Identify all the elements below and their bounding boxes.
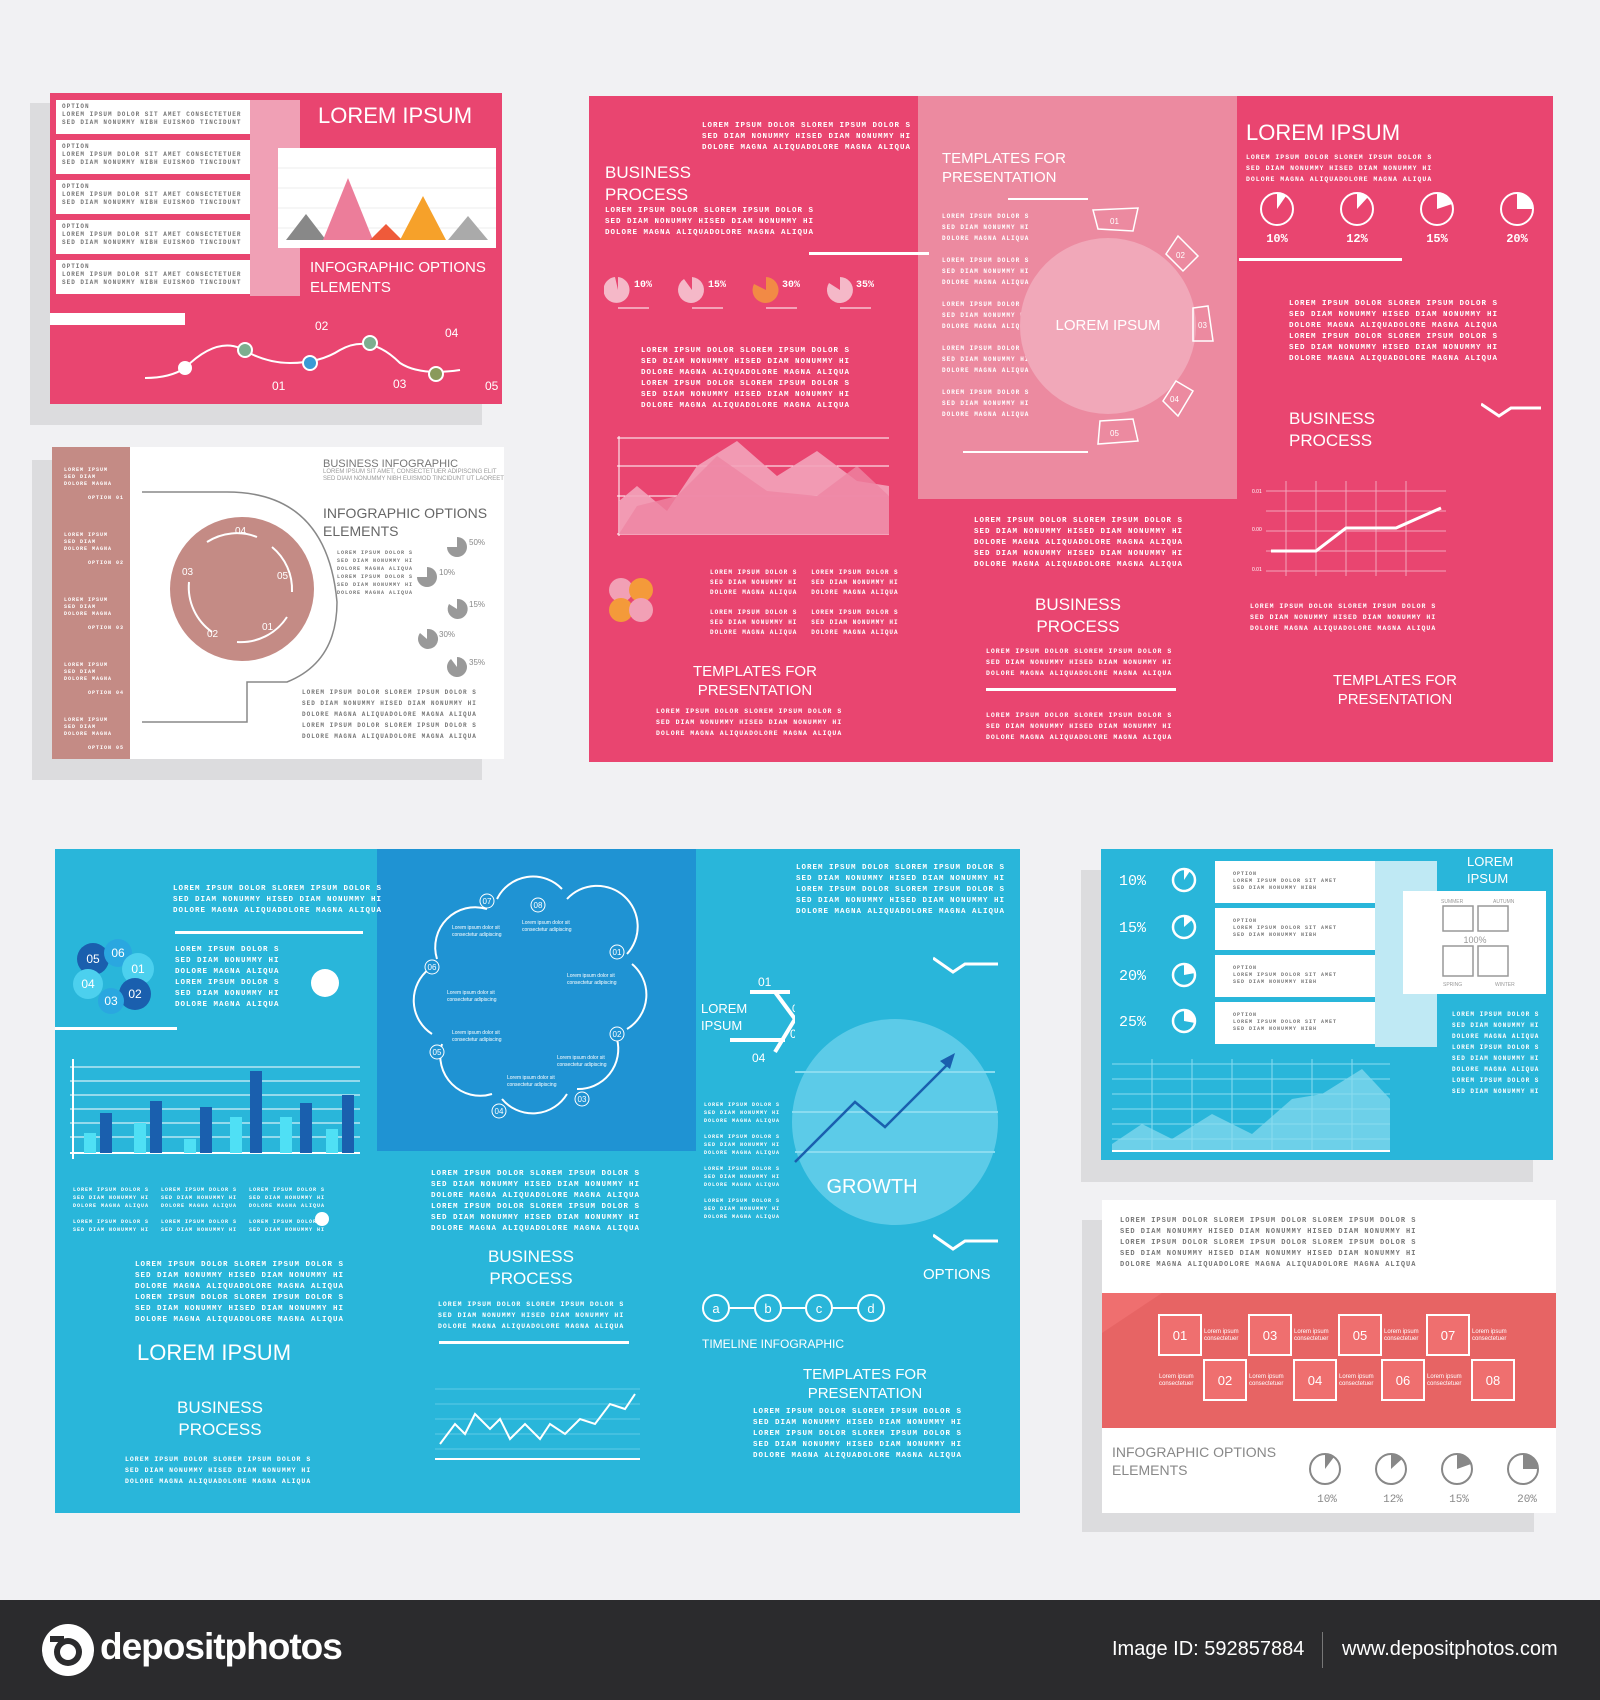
panel A: pink options chart (50, 93, 502, 404)
circle cluster icon: 04 (81, 977, 95, 991)
seasons box (1403, 891, 1546, 994)
circle cluster icon: 03 (104, 994, 118, 1008)
line chart: 0.00 (1252, 527, 1262, 533)
darker center panel: Lorem ipsum dolor sit (522, 920, 570, 926)
circle diagram (1020, 207, 1214, 445)
panel E: blue right: IPSUM (1467, 871, 1508, 886)
panel D: big blue: LOREM IPSUM (137, 1340, 291, 1365)
panel D: big blue: OPTIONS (923, 1266, 991, 1283)
image id: Image ID: 592857884 (1112, 1638, 1304, 1660)
wave timeline: 05 (485, 379, 499, 393)
flower icon (609, 578, 653, 622)
panel B: white circle infographic: LOREM IPSUM SIT AMET, CONSECTETUER ADIPISCING ELIT (323, 469, 497, 475)
top text: LOREM IPSUM DOLOR SLOREM IPSUM DOLOR S SED DIAM NONUMMY HISED DIAM NONUMMY HI DOLORE MAGNA ALIQUADOLORE MAGNA ALIQUA (702, 122, 911, 152)
percent dial list: 10% (1119, 873, 1147, 890)
subtitle: INFOGRAPHIC OPTIONS (310, 259, 486, 276)
option tabs: OPTION LOREM IPSUM DOLOR SIT AMET CONSECTETUER SED DIAM NONUMMY NIBH EUISMOD TINCIDUNT (62, 103, 241, 126)
darker center panel: consectetur adipiscing (447, 997, 497, 1003)
pie list: 30% (439, 630, 455, 639)
coral band with numbered boxes: consectetuer (1472, 1336, 1506, 1342)
head circle diagram (142, 491, 338, 723)
title: LOREM IPSUM (318, 103, 472, 128)
panel B: white circle infographic: ELEMENTS (323, 523, 398, 539)
seasons box: WINTER (1495, 982, 1515, 988)
panel D: big blue: LOREM IPSUM DOLOR SLOREM IPSUM DOLOR S SED DIAM NONUMMY HISED DIAM NONUMMY HI DOLORE MAGNA ALIQUADOLORE MAGNA ALIQUA (173, 885, 382, 915)
heading business process: BUSINESS (605, 163, 691, 182)
brown sidebar (52, 447, 130, 759)
coral band with numbered boxes: consectetuer (1249, 1381, 1283, 1387)
coral band with numbered boxes: 08 (1486, 1373, 1500, 1388)
coral band with numbered boxes: consectetuer (1384, 1336, 1418, 1342)
panel C: big pink: LOREM IPSUM DOLOR SLOREM IPSUM DOLOR S SED DIAM NONUMMY HISED DIAM NONUMMY HI DOLORE MAGNA ALIQUADOLORE MAGNA ALIQUA (1246, 154, 1432, 183)
circle diagram: LOREM IPSUM (1055, 317, 1161, 334)
pie percentages (604, 277, 874, 308)
darker center panel: 08 (534, 901, 543, 910)
panel D: big blue: TIMELINE INFOGRAPHIC (702, 1337, 844, 1351)
line chart: 0.01 (1252, 567, 1262, 573)
panel D: big blue: LOREM IPSUM DOLOR SLOREM IPSUM DOLOR S SED DIAM NONUMMY HISED DIAM NONUMMY HI DOLORE MAGNA ALIQUADOLORE MAGNA ALIQUA LOREM IPSUM DOLOR SLOREM IPSUM DOLOR S SED DIAM NONUMMY HISED DIAM NONUMMY HI DOLORE MAGNA ALIQUADOLORE MAGNA ALIQUA (135, 1261, 344, 1324)
center bottom: LOREM IPSUM DOLOR SLOREM IPSUM DOLOR S SED DIAM NONUMMY HISED DIAM NONUMMY HI DOLORE MAGNA ALIQUADOLORE MAGNA ALIQUA LOREM IPSUM DOLOR SLOREM IPSUM DOLOR S SED DIAM NONUMMY HISED DIAM NONUMMY HI DOLORE MAGNA ALIQUADOLORE MAGNA ALIQUA (431, 1170, 640, 1233)
timeline abcd: c (816, 1301, 823, 1316)
circle cluster icon: 05 (86, 952, 100, 966)
brown sidebar: LOREM IPSUM SED DIAM DOLORE MAGNA OPTION 01 (64, 467, 124, 501)
head circle diagram: 01 (262, 622, 274, 633)
panel F: white/coral timeline (1102, 1200, 1556, 1513)
panel C: big pink: LOREM IPSUM DOLOR SLOREM IPSUM DOLOR S SED DIAM NONUMMY HISED DIAM NONUMMY HI DOLORE MAGNA ALIQUADOLORE MAGNA ALIQUA LOREM IPSUM DOLOR SLOREM IPSUM DOLOR S SED DIAM NONUMMY HISED DIAM NONUMMY HI DOLORE MAGNA ALIQUADOLORE MAGNA ALIQUA (1289, 300, 1498, 363)
percent rings: 15% (1449, 1494, 1469, 1506)
coral band with numbered boxes: consectetuer (1204, 1336, 1238, 1342)
panel D: big blue: LOREM IPSUM DOLOR SLOREM IPSUM DOLOR S SED DIAM NONUMMY HISED DIAM NONUMMY HI DOLORE MAGNA ALIQUADOLORE MAGNA ALIQUA (125, 1456, 311, 1485)
panel D: big blue: LOREM IPSUM DOLOR S LOREM IPSUM DOLOR S LOREM IPSUM DOLOR S SED DIAM NONUMMY HI SED DIAM NONUMMY HI SED DIAM NONUMMY HI DOLORE MAGNA ALIQUA DOLORE MAGNA ALIQUA DOLORE MAGNA ALIQUA LOREM IPSUM DOLOR S LOREM IPSUM DOLOR S LOREM IPSUM DOLOR S SED DIAM NONUMMY HI SED DIAM NONUMMY HI SED DIAM NONUMMY HI (73, 1187, 325, 1233)
panel C: big pink: PRESENTATION (698, 682, 812, 699)
coral band with numbered boxes: Lorem ipsum (1204, 1329, 1239, 1335)
panel D: big blue (55, 849, 1020, 1513)
coral band with numbered boxes: 01 (1173, 1328, 1187, 1343)
circle diagram: 05 (1110, 429, 1119, 438)
percent rings: 10% (1317, 1494, 1337, 1506)
coral band with numbered boxes: 03 (1263, 1328, 1277, 1343)
coral band with numbered boxes: Lorem ipsum (1339, 1374, 1374, 1380)
right column: LOREM IPSUM (1246, 120, 1400, 145)
darker center panel: consectetur adipiscing (567, 980, 617, 986)
timeline abcd: a (712, 1301, 720, 1316)
heading business process: PROCESS (605, 185, 688, 204)
head circle diagram: 04 (235, 526, 247, 537)
right column: LOREM IPSUM DOLOR SLOREM IPSUM DOLOR S SED DIAM NONUMMY HISED DIAM NONUMMY HI LOREM IPSUM DOLOR SLOREM IPSUM DOLOR S SED DIAM NONUMMY HISED DIAM NONUMMY HI DOLORE MAGNA ALIQUADOLORE MAGNA ALIQUA (796, 864, 1005, 916)
pie list: 15% (469, 600, 485, 609)
darker center panel: Lorem ipsum dolor sit (447, 990, 495, 996)
panel D: big blue: LOREM IPSUM DOLOR SLOREM IPSUM DOLOR S SED DIAM NONUMMY HISED DIAM NONUMMY HI DOLORE MAGNA ALIQUADOLORE MAGNA ALIQUA (438, 1301, 624, 1330)
option cards: OPTION LOREM IPSUM DOLOR SIT AMET SED DIAM NONUMMY NIBH (1233, 1012, 1337, 1032)
panel D: big blue: BUSINESS (177, 1398, 263, 1417)
panel F: white/coral timeline: ELEMENTS (1112, 1462, 1187, 1478)
white bar (50, 313, 185, 325)
wave timeline: 03 (393, 377, 407, 391)
coral band with numbered boxes: 07 (1441, 1328, 1455, 1343)
panel E: blue right (1101, 849, 1553, 1160)
pie percentages: 10% (634, 280, 652, 291)
growth circle (792, 1019, 998, 1225)
circle diagram: 01 (1110, 217, 1119, 226)
panel B: white circle infographic: INFOGRAPHIC OPTIONS (323, 505, 487, 521)
pie list: 35% (469, 658, 485, 667)
text block: LOREM IPSUM DOLOR SLOREM IPSUM DOLOR S SED DIAM NONUMMY HISED DIAM NONUMMY HI DOLORE MAGNA ALIQUADOLORE MAGNA ALIQUA LOREM IPSUM DOLOR SLOREM IPSUM DOLOR S DOLORE MAGNA ALIQUADOLORE MAGNA ALIQUA (302, 689, 477, 740)
panel C: big pink: LOREM IPSUM DOLOR S LOREM IPSUM DOLOR S SED DIAM NONUMMY HI SED DIAM NONUMMY HI DOLORE MAGNA ALIQUA DOLORE MAGNA ALIQUA LOREM IPSUM DOLOR S LOREM IPSUM DOLOR S SED DIAM NONUMMY HI SED DIAM NONUMMY HI DOLORE MAGNA ALIQUA DOLORE MAGNA ALIQUA (710, 569, 899, 636)
wave timeline: 04 (445, 326, 459, 340)
coral band with numbered boxes (1102, 1293, 1556, 1428)
brown sidebar: LOREM IPSUM SED DIAM DOLORE MAGNA OPTION 02 (64, 532, 124, 566)
lorem steps (730, 975, 795, 1065)
panel C: big pink: LOREM IPSUM DOLOR SLOREM IPSUM DOLOR S SED DIAM NONUMMY HISED DIAM NONUMMY HI DOLORE MAGNA ALIQUADOLORE MAGNA ALIQUA (986, 648, 1172, 677)
panel D: big blue: PRESENTATION (808, 1385, 922, 1402)
coral band with numbered boxes: Lorem ipsum (1472, 1329, 1507, 1335)
seasons box: SPRING (1443, 982, 1462, 988)
percent rings (1309, 1453, 1539, 1506)
coral band with numbered boxes: Lorem ipsum (1159, 1374, 1194, 1380)
percent dial list (1119, 868, 1196, 1034)
panel C: big pink: PROCESS (1289, 431, 1372, 450)
panel C: big pink: TEMPLATES FOR (1333, 672, 1457, 689)
darker center panel: consectetur adipiscing (557, 1062, 607, 1068)
panel D: big blue: TEMPLATES FOR (803, 1366, 927, 1383)
percent dial list: 25% (1119, 1014, 1147, 1031)
logo icon (42, 1624, 94, 1676)
percent dial list: 15% (1119, 920, 1147, 937)
panel C: big pink: LOREM IPSUM DOLOR SLOREM IPSUM DOLOR S SED DIAM NONUMMY HISED DIAM NONUMMY HI DOLORE MAGNA ALIQUADOLORE MAGNA ALIQUA (656, 708, 842, 737)
darker center panel: consectetur adipiscing (522, 927, 572, 933)
option tabs: OPTION LOREM IPSUM DOLOR SIT AMET CONSECTETUER SED DIAM NONUMMY NIBH EUISMOD TINCIDUNT (62, 223, 241, 246)
darker center panel: 03 (578, 1095, 587, 1104)
circle diagram: 03 (1198, 321, 1207, 330)
coral band with numbered boxes: consectetuer (1159, 1381, 1193, 1387)
headings: BUSINESS INFOGRAPHIC (323, 458, 458, 470)
panel C: big pink: LOREM IPSUM DOLOR SLOREM IPSUM DOLOR S SED DIAM NONUMMY HISED DIAM NONUMMY HI DOLORE MAGNA ALIQUADOLORE MAGNA ALIQUA LOREM IPSUM DOLOR SLOREM IPSUM DOLOR S SED DIAM NONUMMY HISED DIAM NONUMMY HI DOLORE MAGNA ALIQUADOLORE MAGNA ALIQUA (641, 347, 850, 410)
darker center panel: consectetur adipiscing (452, 1037, 502, 1043)
url: www.depositphotos.com (1342, 1638, 1558, 1660)
darker center panel: 06 (428, 963, 437, 972)
panel F: white/coral timeline: LOREM IPSUM DOLOR SLOREM IPSUM DOLOR SLOREM IPSUM DOLOR S SED DIAM NONUMMY HISED DIAM NONUMMY HISED DIAM NONUMMY HI LOREM IPSUM DOLOR SLOREM IPSUM DOLOR SLOREM IPSUM DOLOR S SED DIAM NONUMMY HISED DIAM NONUMMY HISED DIAM NONUMMY HI DOLORE MAGNA ALIQUADOLORE MAGNA ALIQUADOLORE MAGNA ALIQUA (1120, 1217, 1416, 1269)
circle cluster icon: 01 (131, 962, 145, 976)
pie percentages: 15% (708, 280, 726, 291)
pie percentages: 35% (856, 280, 874, 291)
subtitle: ELEMENTS (310, 279, 391, 296)
darker center panel: consectetur adipiscing (452, 932, 502, 938)
check arrow (1481, 402, 1541, 418)
panel C: big pink: LOREM IPSUM DOLOR SLOREM IPSUM DOLOR S SED DIAM NONUMMY HISED DIAM NONUMMY HI DOLORE MAGNA ALIQUADOLORE MAGNA ALIQUA (605, 207, 814, 237)
timeline abcd: b (764, 1301, 772, 1316)
panel D: big blue: IPSUM (701, 1018, 742, 1033)
coral band with numbered boxes: 06 (1396, 1373, 1410, 1388)
option tabs: OPTION LOREM IPSUM DOLOR SIT AMET CONSECTETUER SED DIAM NONUMMY NIBH EUISMOD TINCIDUNT (62, 263, 241, 286)
darker center panel: Lorem ipsum dolor sit (452, 1030, 500, 1036)
panel D: big blue: LOREM (701, 1001, 747, 1016)
area grid chart (1112, 1059, 1390, 1152)
panel B: white circle infographic: SED DIAM NONUMMY NIBH EUISMOD TINCIDUNT UT LAOREET (323, 476, 504, 482)
darker center panel: 07 (483, 897, 492, 906)
darker center panel: Lorem ipsum dolor sit (452, 925, 500, 931)
panel B: white circle infographic (52, 447, 504, 759)
panel C: big pink: LOREM IPSUM DOLOR SLOREM IPSUM DOLOR S SED DIAM NONUMMY HISED DIAM NONUMMY HI DOLORE MAGNA ALIQUADOLORE MAGNA ALIQUA (1250, 603, 1436, 632)
option tabs (56, 100, 300, 296)
panel D: big blue: BUSINESS (488, 1247, 574, 1266)
footer bar (0, 1600, 1600, 1700)
darker center panel: Lorem ipsum dolor sit (567, 973, 615, 979)
circle cluster icon: 02 (128, 987, 142, 1001)
head circle diagram: 03 (182, 567, 194, 578)
darker center panel: 05 (433, 1048, 442, 1057)
middle-bottom text: LOREM IPSUM DOLOR SLOREM IPSUM DOLOR S SED DIAM NONUMMY HISED DIAM NONUMMY HI DOLORE MAGNA ALIQUADOLORE MAGNA ALIQUA SED DIAM NONUMMY HISED DIAM NONUMMY HI DOLORE MAGNA ALIQUADOLORE MAGNA ALIQUA (974, 517, 1183, 569)
panel D: big blue: PROCESS (489, 1269, 573, 1288)
panel D: big blue: LOREM IPSUM DOLOR S SED DIAM NONUMMY HI DOLORE MAGNA ALIQUA LOREM IPSUM DOLOR S SED DIAM NONUMMY HI DOLORE MAGNA ALIQUA LOREM IPSUM DOLOR S SED DIAM NONUMMY HI DOLORE MAGNA ALIQUA LOREM IPSUM DOLOR S SED DIAM NONUMMY HI DOLORE MAGNA ALIQUA (704, 1102, 780, 1220)
lorem steps: 04 (752, 1051, 766, 1065)
panel C: big pink: TEMPLATES FOR (693, 663, 817, 680)
panel C: big pink: BUSINESS (1035, 595, 1121, 614)
pie list: 10% (439, 568, 455, 577)
coral band with numbered boxes: Lorem ipsum (1384, 1329, 1419, 1335)
darker center panel: Lorem ipsum dolor sit (507, 1075, 555, 1081)
subtitle (310, 259, 486, 296)
panel C: big pink: PROCESS (1036, 617, 1120, 636)
panel C: big pink: PRESENTATION (1338, 691, 1452, 708)
timeline abcd: d (867, 1301, 875, 1316)
heading business process (605, 163, 691, 204)
darker center panel: Lorem ipsum dolor sit (557, 1055, 605, 1061)
coral band with numbered boxes: consectetuer (1339, 1381, 1373, 1387)
panel D: big blue: LOREM IPSUM DOLOR SLOREM IPSUM DOLOR S SED DIAM NONUMMY HISED DIAM NONUMMY HI LOREM IPSUM DOLOR SLOREM IPSUM DOLOR S SED DIAM NONUMMY HISED DIAM NONUMMY HI DOLORE MAGNA ALIQUADOLORE MAGNA ALIQUA (753, 1408, 962, 1460)
line chart: 0.01 (1252, 489, 1262, 495)
coral band with numbered boxes: consectetuer (1427, 1381, 1461, 1387)
darker center panel (377, 849, 696, 1151)
percent rings: 20% (1517, 1494, 1537, 1506)
coral band with numbered boxes: 04 (1308, 1373, 1322, 1388)
inner light panel: LOREM IPSUM DOLOR S SED DIAM NONUMMY HI DOLORE MAGNA ALIQUA LOREM IPSUM DOLOR S SED DIAM NONUMMY HI DOLORE MAGNA ALIQUA LOREM IPSUM DOLOR S SED DIAM NONUMMY HI DOLORE MAGNA ALIQUA LOREM IPSUM DOLOR S SED DIAM NONUMMY HI DOLORE MAGNA ALIQUA LOREM IPSUM DOLOR S SED DIAM NONUMMY HI DOLORE MAGNA ALIQUA (942, 213, 1029, 418)
line chart (1252, 481, 1446, 576)
seasons box: AUTUMN (1493, 899, 1515, 905)
panel C: big pink (589, 96, 1553, 762)
timeline abcd (702, 1294, 885, 1322)
percent rings: 12% (1383, 1494, 1403, 1506)
option tabs: OPTION LOREM IPSUM DOLOR SIT AMET CONSECTETUER SED DIAM NONUMMY NIBH EUISMOD TINCIDUNT (62, 143, 241, 166)
panel E shadow (1081, 870, 1533, 1182)
inner light panel: TEMPLATES FOR (942, 150, 1066, 167)
coral band with numbered boxes: Lorem ipsum (1427, 1374, 1462, 1380)
inner light panel (918, 96, 1237, 499)
logo text: depositphotos (100, 1626, 342, 1667)
inner light panel: PRESENTATION (942, 169, 1056, 186)
circle cluster icon (73, 939, 154, 1014)
panel A shadow (30, 103, 482, 425)
area chart (617, 436, 889, 536)
pie list: LOREM IPSUM DOLOR S SED DIAM NONUMMY HI DOLORE MAGNA ALIQUA LOREM IPSUM DOLOR S SED DIAM NONUMMY HI DOLORE MAGNA ALIQUA (337, 550, 413, 596)
pie percentages: 30% (782, 280, 800, 291)
brown sidebar: LOREM IPSUM SED DIAM DOLORE MAGNA OPTION 04 (64, 662, 124, 696)
wave timeline: 01 (272, 379, 286, 393)
triangle chart (278, 148, 496, 248)
coral band with numbered boxes: 02 (1218, 1373, 1232, 1388)
growth circle: GROWTH (826, 1176, 918, 1198)
panel E: blue right: LOREM IPSUM DOLOR S SED DIAM NONUMMY HI DOLORE MAGNA ALIQUA LOREM IPSUM DOLOR S SED DIAM NONUMMY HI DOLORE MAGNA ALIQUA LOREM IPSUM DOLOR S SED DIAM NONUMMY HI (1452, 1011, 1539, 1095)
brown sidebar: LOREM IPSUM SED DIAM DOLORE MAGNA OPTION 03 (64, 597, 124, 631)
panel F shadow (1082, 1220, 1534, 1532)
seasons box: 100% (1463, 935, 1487, 945)
pie list (337, 537, 485, 677)
panel D: big blue: LOREM IPSUM DOLOR S SED DIAM NONUMMY HI DOLORE MAGNA ALIQUA LOREM IPSUM DOLOR S SED DIAM NONUMMY HI DOLORE MAGNA ALIQUA (175, 946, 280, 1009)
option tabs: OPTION LOREM IPSUM DOLOR SIT AMET CONSECTETUER SED DIAM NONUMMY NIBH EUISMOD TINCIDUNT (62, 183, 241, 206)
panel D: big blue: PROCESS (178, 1420, 262, 1439)
option cards: OPTION LOREM IPSUM DOLOR SIT AMET SED DIAM NONUMMY NIBH (1233, 918, 1337, 938)
pie list: 50% (469, 538, 485, 547)
circle diagram: 04 (1170, 395, 1179, 404)
option cards: OPTION LOREM IPSUM DOLOR SIT AMET SED DIAM NONUMMY NIBH (1233, 871, 1337, 891)
darker center panel: 02 (613, 1030, 622, 1039)
darker center panel: 01 (613, 948, 622, 957)
coral band with numbered boxes: Lorem ipsum (1294, 1329, 1329, 1335)
darker center panel: consectetur adipiscing (507, 1082, 557, 1088)
coral band with numbered boxes: Lorem ipsum (1249, 1374, 1284, 1380)
panel C: big pink: BUSINESS (1289, 409, 1375, 428)
coral band with numbered boxes: consectetuer (1294, 1336, 1328, 1342)
option cards: OPTION LOREM IPSUM DOLOR SIT AMET SED DIAM NONUMMY NIBH (1233, 965, 1337, 985)
panel C: big pink: LOREM IPSUM DOLOR SLOREM IPSUM DOLOR S SED DIAM NONUMMY HISED DIAM NONUMMY HI DOLORE MAGNA ALIQUADOLORE MAGNA ALIQUA (986, 712, 1172, 741)
bar chart (70, 1059, 360, 1159)
option cards (1215, 861, 1437, 1047)
head circle diagram: 05 (277, 571, 289, 582)
panel B shadow (32, 460, 482, 780)
lorem steps: 01 (758, 975, 772, 989)
seasons box: SUMMER (1441, 899, 1464, 905)
brown sidebar: LOREM IPSUM SED DIAM DOLORE MAGNA OPTION 05 (64, 717, 124, 751)
wave timeline: 02 (315, 319, 329, 333)
circle cluster icon: 06 (111, 946, 125, 960)
darker center panel: 04 (495, 1107, 504, 1116)
coral band with numbered boxes: 05 (1353, 1328, 1367, 1343)
panel F: white/coral timeline: INFOGRAPHIC OPTIONS (1112, 1444, 1276, 1460)
percent rings (1260, 192, 1534, 244)
percent dial list: 20% (1119, 968, 1147, 985)
head circle diagram: 02 (207, 629, 219, 640)
circle diagram: 02 (1176, 251, 1185, 260)
wave timeline (145, 319, 499, 393)
zigzag chart (435, 1388, 640, 1460)
panel E: blue right: LOREM (1467, 854, 1513, 869)
